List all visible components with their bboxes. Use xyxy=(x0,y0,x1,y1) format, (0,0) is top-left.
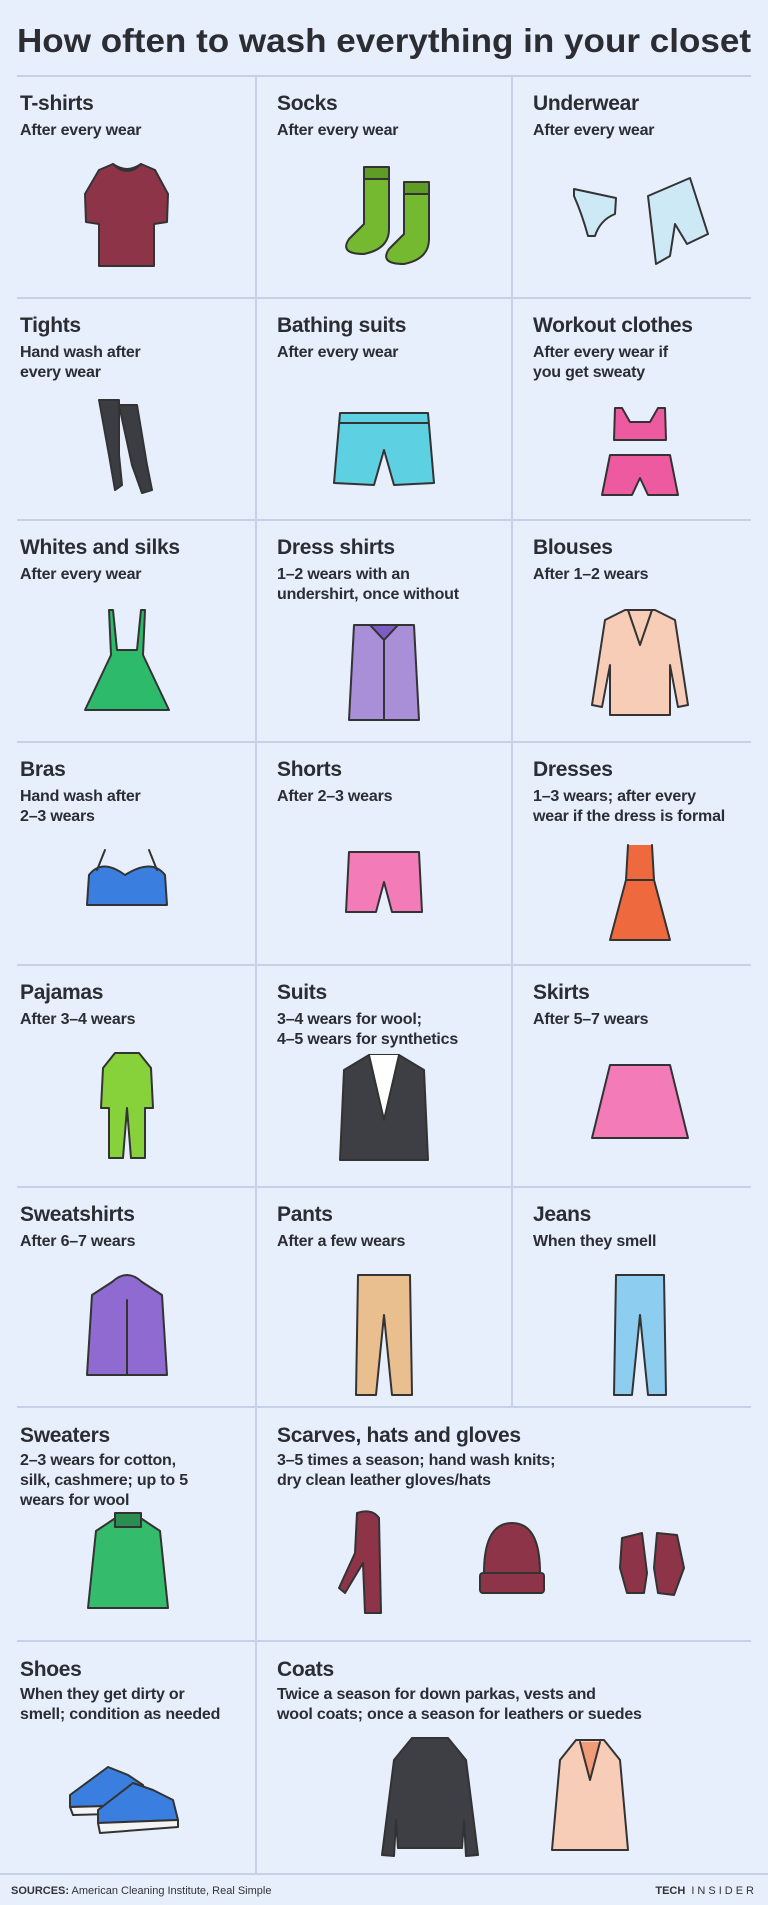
icon: t-shirt xyxy=(85,164,168,266)
panel: Blouses xyxy=(533,536,688,715)
panel: Suits: 4–5 wears for synthetics xyxy=(277,1031,458,1048)
panel: Blouses: After 1–2 wears xyxy=(533,566,649,583)
panel: Sweaters: wears for wool xyxy=(19,1492,129,1509)
panel: Socks: After every wear xyxy=(277,122,398,139)
panel: Shorts: Shorts xyxy=(277,758,342,781)
panel: Socks xyxy=(277,92,429,264)
panel: Shoes: smell; condition as needed xyxy=(20,1706,220,1723)
panel: Dress shirts xyxy=(277,536,460,720)
icon: gloves xyxy=(620,1533,684,1595)
icon: underwear xyxy=(574,178,708,264)
panel: Jeans: When they smell xyxy=(533,1233,656,1250)
panel: Bathing suits: Bathing suits xyxy=(277,314,406,337)
panel: Sweaters xyxy=(19,1424,188,1608)
icon: leather jacket xyxy=(382,1738,478,1856)
icon: green dress xyxy=(85,610,169,710)
panel: Pajamas xyxy=(20,981,153,1158)
panel: Jeans: Jeans xyxy=(533,1203,591,1226)
icon: hoodie xyxy=(87,1275,167,1375)
panel: Tights xyxy=(20,314,152,493)
panel: Whites and silks: Whites and silks xyxy=(20,536,180,559)
panel: Sweatshirts: After 6–7 wears xyxy=(20,1233,136,1250)
panel: Shoes xyxy=(20,1658,220,1833)
panel: Sweaters: Sweaters xyxy=(20,1424,110,1447)
panel: Suits xyxy=(277,981,458,1160)
panel: Sweatshirts xyxy=(20,1203,167,1375)
panel: Coats xyxy=(276,1658,642,1856)
panel: Scarves, hats and gloves: 3–5 times a season; hand wash knits; xyxy=(277,1452,555,1469)
panel: Bras: 2–3 wears xyxy=(20,808,95,825)
panel: Underwear xyxy=(533,92,708,264)
panel: Pajamas: After 3–4 wears xyxy=(20,1011,136,1028)
icon: socks xyxy=(346,167,429,264)
panel: Dresses: 1–3 wears; after every xyxy=(533,788,696,805)
icon: pink coat xyxy=(552,1740,628,1850)
panel: Dresses: wear if the dress is formal xyxy=(532,808,725,825)
panel: Dress shirts: 1–2 wears with an xyxy=(277,566,410,583)
icon: sweater xyxy=(88,1513,168,1608)
panel: T-shirts xyxy=(20,92,168,266)
panel: Scarves, hats and gloves: dry clean leather gloves/hats xyxy=(277,1472,491,1489)
icon: skirt xyxy=(592,1065,688,1138)
panel: Shoes: When they get dirty or xyxy=(20,1686,184,1703)
panel: Dresses: Dresses xyxy=(533,758,613,781)
panel: Shorts: After 2–3 wears xyxy=(277,788,393,805)
panel: Shorts xyxy=(277,758,422,912)
panel: Bras: Bras xyxy=(20,758,66,781)
panel: Workout clothes xyxy=(533,314,693,495)
panel: Scarves, hats and gloves: Scarves, hats and gloves xyxy=(277,1424,521,1447)
panel: Whites and silks: After every wear xyxy=(20,566,141,583)
panel: Underwear: After every wear xyxy=(533,122,654,139)
panel: Skirts: Skirts xyxy=(533,981,590,1004)
panel: Skirts xyxy=(533,981,688,1138)
panel: Sweaters: silk, cashmere; up to 5 xyxy=(20,1472,188,1489)
icon: sneakers xyxy=(70,1767,178,1833)
panel: Sweatshirts: Sweatshirts xyxy=(20,1203,135,1226)
panel: Bras: Hand wash after xyxy=(20,788,141,805)
panel: Tights: Hand wash after xyxy=(20,344,141,361)
panel: Workout clothes: After every wear if xyxy=(533,344,669,361)
icon: pajamas xyxy=(101,1053,153,1158)
panel: Workout clothes: you get sweaty xyxy=(533,364,645,381)
panel: Skirts: After 5–7 wears xyxy=(533,1011,649,1028)
panel: Tights: Tights xyxy=(20,314,81,337)
icon: blouse xyxy=(592,610,688,715)
title: How often to wash everything in your closet xyxy=(17,22,751,59)
icon: hat xyxy=(480,1523,544,1593)
panel: Tights: every wear xyxy=(20,364,101,381)
icon: orange dress xyxy=(610,845,670,940)
panel: Workout clothes: Workout clothes xyxy=(533,314,693,337)
icon: suit jacket xyxy=(340,1055,428,1160)
icon: shorts xyxy=(346,852,422,912)
icon: tights xyxy=(99,400,152,493)
panel: Pajamas: Pajamas xyxy=(20,981,103,1004)
panel: Sweaters: 2–3 wears for cotton, xyxy=(20,1452,176,1469)
panel: Blouses: Blouses xyxy=(533,536,613,559)
panel: Coats: Twice a season for down parkas, vests and xyxy=(277,1686,596,1703)
panel: Underwear: Underwear xyxy=(533,92,639,115)
icon: bra xyxy=(87,850,167,905)
icon: pants xyxy=(356,1275,412,1395)
panel: T-shirts: After every wear xyxy=(20,122,141,139)
panel: Coats: Coats xyxy=(277,1658,334,1681)
icon: workout set xyxy=(602,408,678,495)
panel: Suits: Suits xyxy=(277,981,327,1004)
icon: dress shirt xyxy=(349,625,419,720)
panel: Scarves, hats and gloves xyxy=(277,1424,684,1613)
logo: Tech Insider: TECH INSIDER xyxy=(655,1885,757,1897)
icon: jeans xyxy=(614,1275,666,1395)
panel: Pants: Pants xyxy=(277,1203,333,1226)
icon: scarf xyxy=(339,1511,381,1613)
panel: Coats: wool coats; once a season for leathers or suedes xyxy=(276,1706,642,1723)
panel: Socks: Socks xyxy=(277,92,337,115)
panel: Suits: 3–4 wears for wool; xyxy=(277,1011,422,1028)
footer: sources: SOURCES: American Cleaning Institute, Real Simple xyxy=(11,1885,271,1897)
panel: Bathing suits: After every wear xyxy=(277,344,398,361)
panel: T-shirts: T-shirts xyxy=(20,92,93,115)
panel: Pants: After a few wears xyxy=(277,1233,406,1250)
panel: Whites and silks xyxy=(20,536,180,710)
panel: Shoes: Shoes xyxy=(20,1658,82,1681)
panel: Bras xyxy=(20,758,167,905)
panel: Jeans xyxy=(533,1203,666,1395)
panel: Dresses xyxy=(532,758,725,940)
panel: Pants xyxy=(277,1203,412,1395)
panel: Dress shirts: undershirt, once without xyxy=(277,586,460,603)
panel: Dress shirts: Dress shirts xyxy=(277,536,395,559)
icon: swim trunks xyxy=(334,413,434,485)
panel: Bathing suits xyxy=(277,314,434,485)
